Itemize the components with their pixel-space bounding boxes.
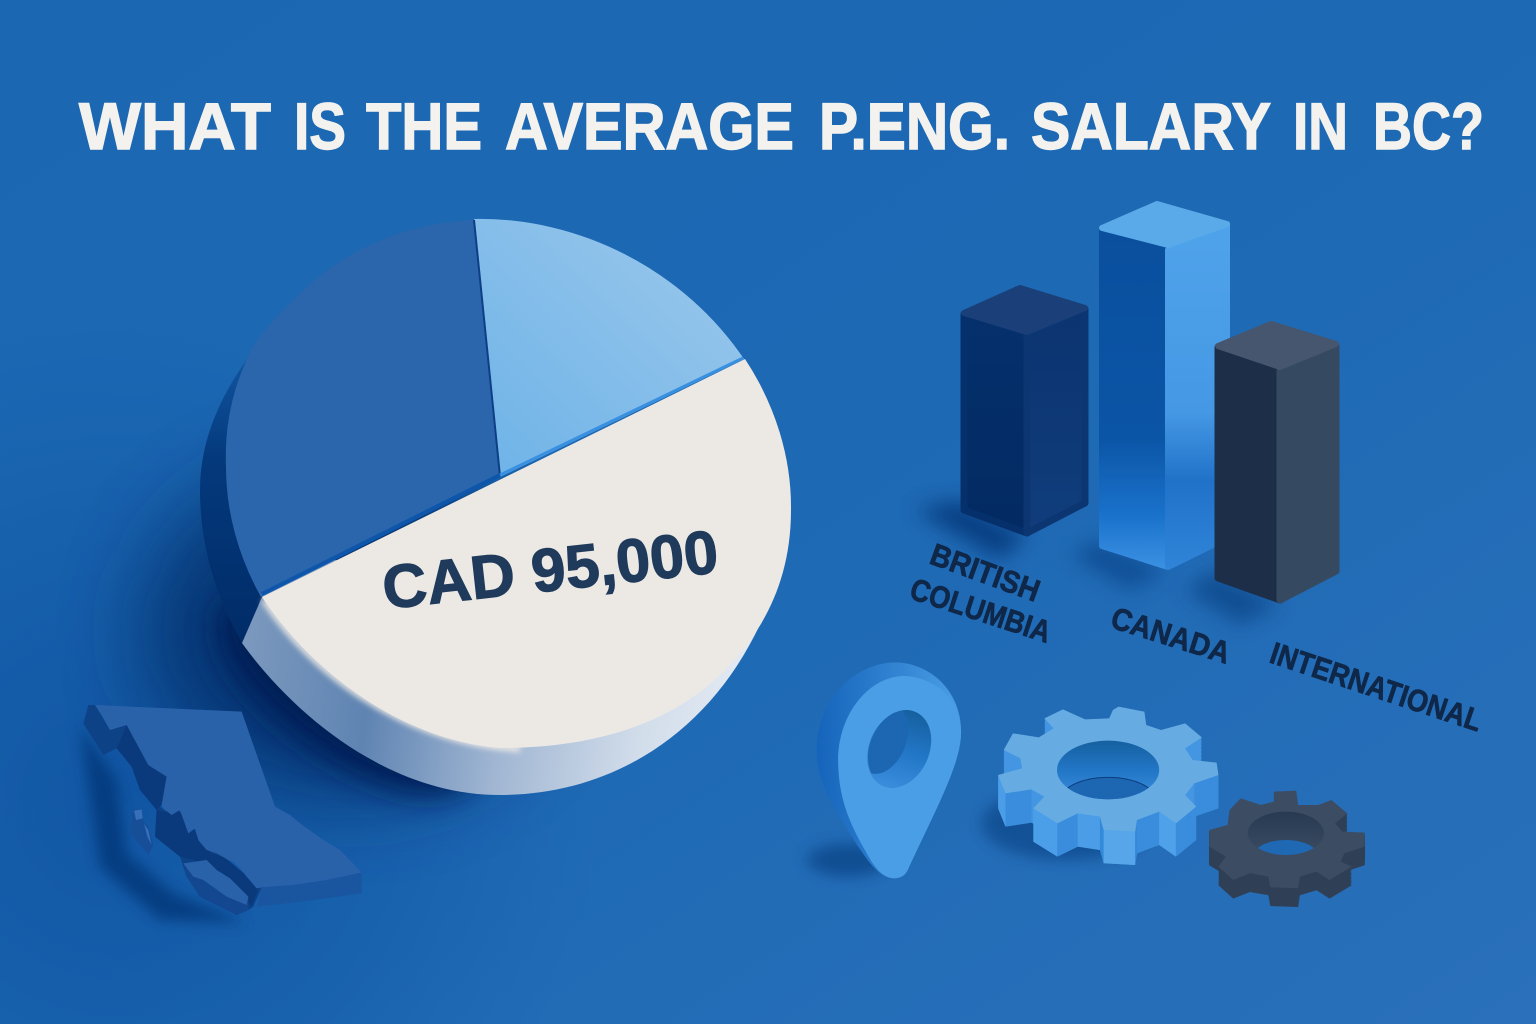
gear extrusion	[998, 708, 1218, 865]
gear side facets	[998, 775, 1218, 865]
small gear extrusion	[1209, 792, 1365, 907]
title: P.ENG.	[819, 89, 1010, 163]
pie dark blue side wall	[200, 340, 320, 643]
small gear hole	[1248, 812, 1324, 855]
title: IS	[294, 89, 346, 163]
pie white slice side wall	[242, 560, 762, 795]
bar chart	[964, 204, 1336, 600]
pie slice: white	[262, 359, 791, 748]
map coast side wall	[83, 705, 262, 915]
map front edge	[257, 873, 362, 907]
bar: Canada	[1102, 204, 1227, 567]
bar labels	[906, 537, 1487, 738]
map shadow	[80, 727, 247, 923]
bar: International	[1218, 324, 1336, 600]
pie slice: dark blue	[226, 220, 500, 597]
pie ground shadow	[140, 460, 560, 832]
bar: British Columbia	[964, 288, 1085, 533]
bar shadows	[915, 500, 1280, 625]
small gear top face	[1209, 791, 1365, 888]
title	[79, 89, 1484, 163]
pin back	[817, 662, 961, 878]
pin shadow	[807, 843, 889, 877]
gear top face	[998, 707, 1218, 832]
Haida Gwaii	[130, 808, 153, 855]
label: Canada: CANADA	[1107, 600, 1235, 671]
label: International: INTERNATIONAL	[1266, 635, 1487, 738]
map sheet-shadow on upper coast	[117, 725, 167, 810]
label: Columbia: COLUMBIA	[906, 571, 1056, 650]
pie chart	[200, 219, 791, 795]
title: SALARY	[1031, 89, 1271, 163]
title: AVERAGE	[505, 89, 794, 163]
pie white slice soft shaded edge	[264, 600, 520, 749]
pie value label: CAD 95,000	[379, 517, 721, 622]
pie divider: blue and white	[262, 475, 500, 594]
gear hole	[1057, 740, 1160, 800]
title: BC?	[1373, 89, 1484, 163]
pin hole	[867, 710, 932, 788]
title: WHAT	[79, 89, 271, 163]
pin face	[838, 676, 961, 878]
icon: small gear	[1209, 791, 1365, 907]
Vancouver Island	[183, 860, 248, 915]
title: IN	[1293, 89, 1348, 163]
icon: location pin	[807, 662, 961, 878]
gear shadow	[981, 787, 1152, 860]
icon: British Columbia map	[80, 705, 362, 923]
pie divider: blue and light blue	[474, 220, 500, 476]
map top face	[95, 705, 362, 888]
icon: large gear	[981, 707, 1218, 865]
label: British: BRITISH	[926, 537, 1045, 609]
pie divider: light blue and white	[500, 358, 743, 475]
pie slice: light blue	[474, 219, 744, 477]
title: THE	[366, 89, 482, 163]
map teeth	[155, 810, 258, 907]
